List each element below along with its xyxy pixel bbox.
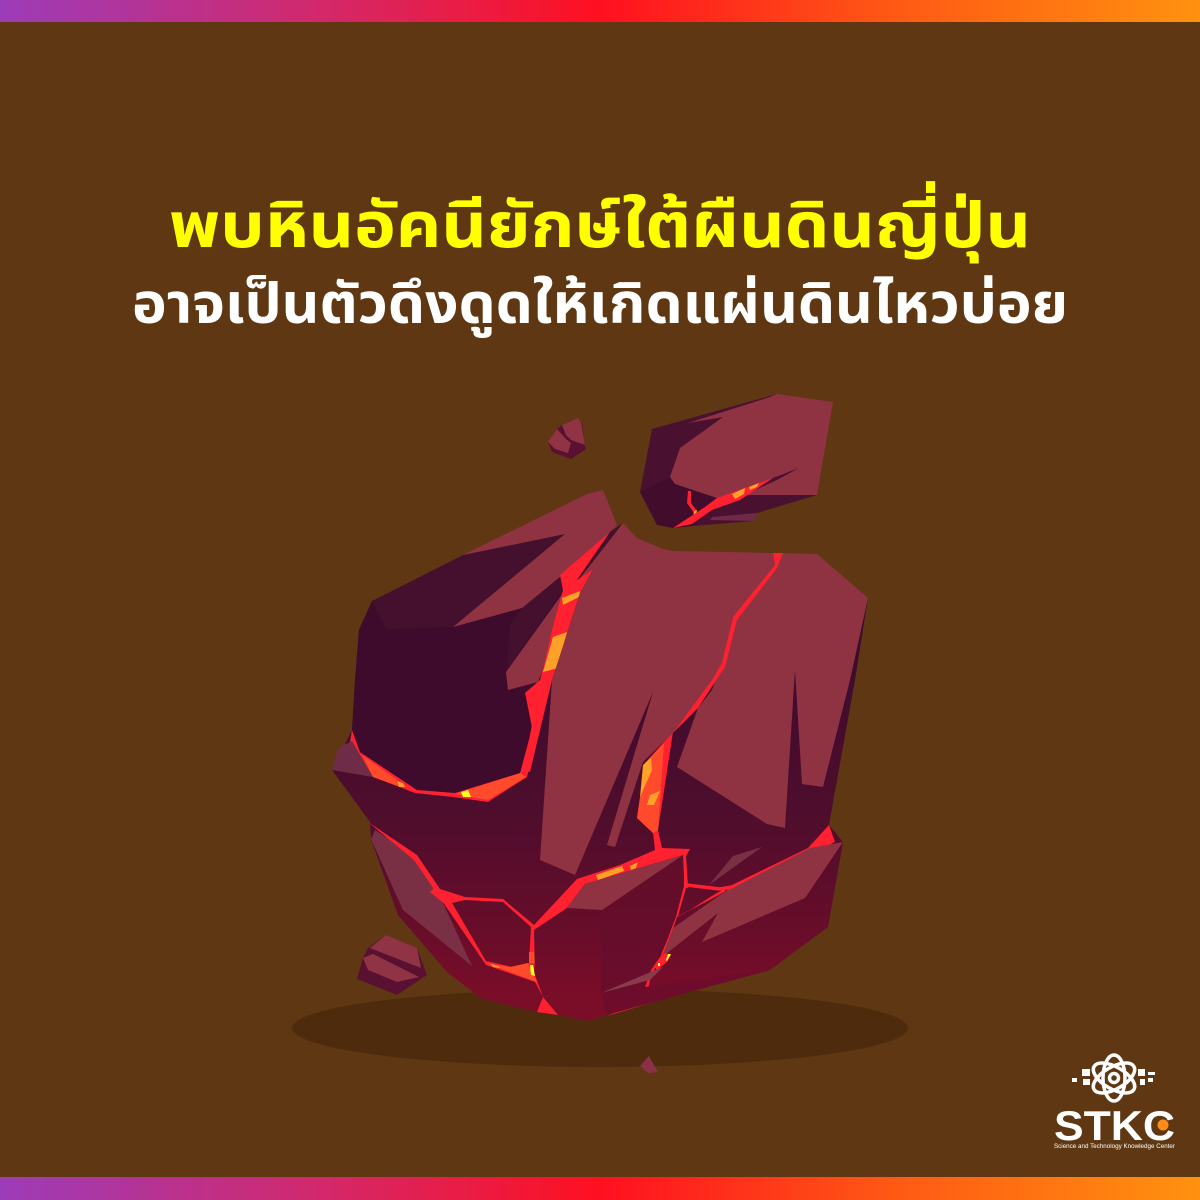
right block lower band bbox=[601, 970, 770, 1015]
dark sliver by top crack bbox=[577, 523, 623, 580]
atom icon bbox=[1089, 1055, 1139, 1101]
main rock bbox=[332, 490, 868, 1021]
lava strips bbox=[596, 862, 638, 880]
bottom gradient bar bbox=[0, 1177, 1200, 1200]
lava cell left bbox=[452, 900, 531, 967]
top gradient bar bbox=[0, 0, 1200, 22]
STKC logo bbox=[1054, 1055, 1175, 1150]
lava cell glow bbox=[486, 952, 537, 982]
right front block bbox=[646, 842, 843, 1003]
left ring facet bbox=[332, 741, 373, 777]
lower left light facet bbox=[371, 830, 472, 966]
front sliver bbox=[601, 967, 663, 993]
right block light facet bbox=[662, 842, 843, 957]
front center block bbox=[534, 855, 684, 1021]
logo orange dot bbox=[1158, 1120, 1168, 1130]
small facet right bbox=[709, 847, 762, 885]
lower lava network bbox=[368, 822, 835, 1016]
main light left piece bbox=[540, 523, 775, 875]
lava cell right bbox=[678, 888, 718, 916]
upper right rock chunk bbox=[640, 394, 833, 528]
small rock bottom left bbox=[357, 935, 427, 995]
small rock top bbox=[548, 418, 586, 459]
right lava crack bbox=[673, 553, 783, 733]
logo wordmark: STKC bbox=[1054, 1102, 1175, 1149]
lobe inner wedge bbox=[507, 577, 563, 670]
logo pixels bbox=[1072, 1069, 1155, 1085]
left dark lobe bbox=[352, 601, 532, 793]
main light right piece bbox=[677, 553, 868, 828]
lava sparks bbox=[654, 953, 671, 970]
lava crack upper bbox=[523, 532, 610, 772]
ground shadow bbox=[292, 989, 908, 1067]
lava behind left lobe bbox=[350, 532, 610, 802]
lobe upper dark facet bbox=[372, 534, 565, 629]
logo caption: Science and Technology Knowledge Center bbox=[1054, 1144, 1175, 1150]
lobe top light facet bbox=[453, 490, 617, 627]
lobe light sliver bbox=[506, 593, 567, 690]
title: พบหินอัคนียักษ์ใต้ผืนดินญี่ปุ่น bbox=[169, 181, 1031, 263]
front block side face bbox=[601, 855, 684, 993]
front block top facet bbox=[567, 855, 683, 910]
lower left dark facet bbox=[371, 839, 543, 1012]
tiny rock bottom bbox=[640, 1056, 658, 1073]
rock back body bbox=[332, 532, 868, 1021]
subtitle: อาจเป็นตัวดึงดูดให้เกิดแผ่นดินไหวบ่อย bbox=[132, 272, 1068, 338]
central lava bbox=[637, 732, 690, 860]
